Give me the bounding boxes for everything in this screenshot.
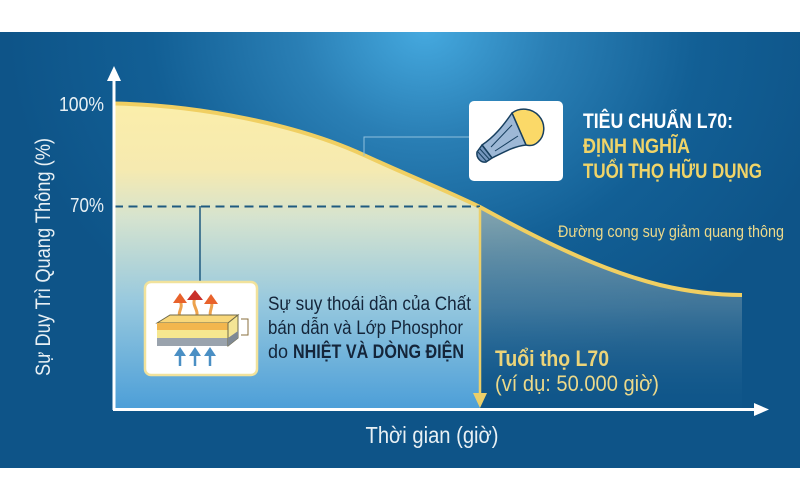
heading: L70 standard [583,108,762,183]
L70 vertical arrow [473,207,487,408]
icon: heat arrows [173,290,218,318]
L70 lifetime label [495,346,659,396]
area under curve: after L70 [480,207,742,408]
degradation text: NHIỆT VÀ DÒNG ĐIỆN [293,341,464,363]
L70 lifetime label: (ví dụ: 50.000 giờ) [495,371,659,396]
icon: light bulb [477,109,544,162]
degradation text: do [268,342,288,363]
connector to degradation callout [199,206,201,282]
bulb card [469,101,563,181]
y axis labels: 70% [70,194,104,217]
y axis labels: 100% [59,93,104,116]
connector to bulb card [364,137,470,156]
degradation text: bán dẫn và Lớp Phosphor [268,317,464,339]
degradation card [145,282,257,375]
heading: L70 standard: ĐỊNH NGHĨA [583,133,690,158]
y axis arrow [107,66,121,410]
x axis title: Thời gian (giờ) [366,422,498,448]
area under curve: before L70 [114,102,480,408]
icon: layered semiconductor block [157,315,248,346]
heading: L70 standard: TIÊU CHUẨN L70: [583,108,733,133]
L70 lifetime label: Tuổi thọ L70 [495,346,609,371]
x axis arrow [113,403,769,416]
70% dashed line [114,206,480,208]
degradation text: Sự suy thoái dần của Chất [268,294,472,315]
y axis title: Sự Duy Trì Quang Thông (%) [32,138,55,376]
degradation text [268,294,472,363]
y axis labels [59,93,104,217]
icon: current arrows [174,347,216,366]
decay curve [114,104,742,295]
